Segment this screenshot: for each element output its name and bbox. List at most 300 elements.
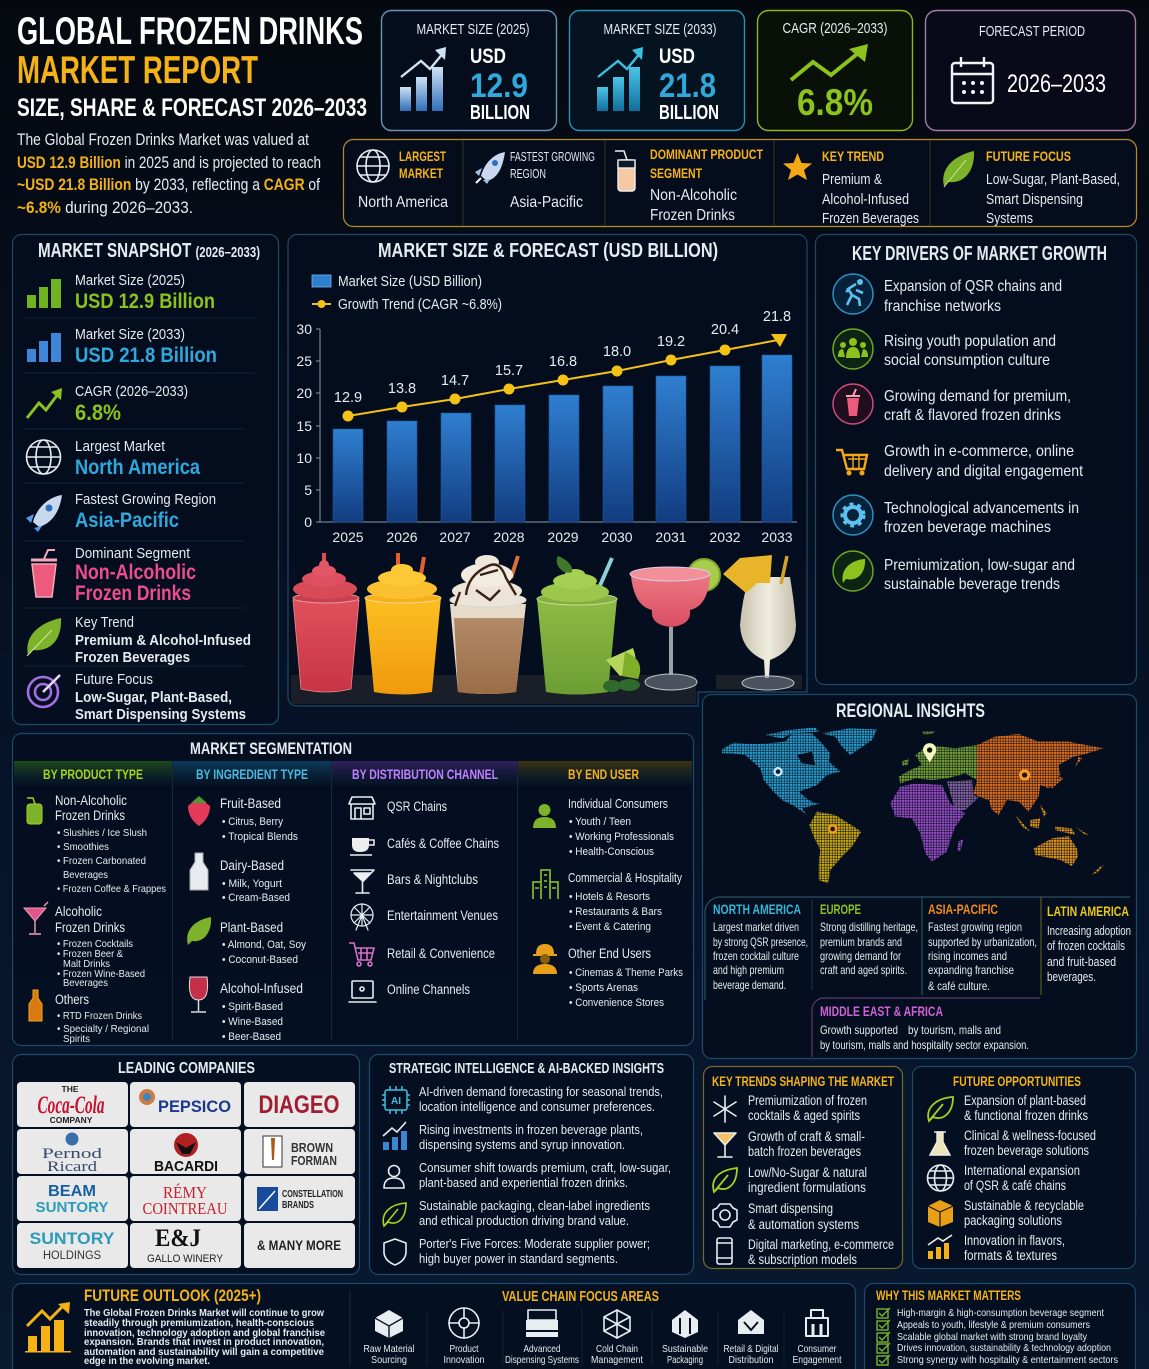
value chain: sustainable packaging: Sustainable (662, 1343, 708, 1355)
trend: smart dispensing (713, 1201, 859, 1232)
trend: craft: Growth of craft & small- (748, 1129, 865, 1144)
region: north america: NORTH AMERICA (713, 901, 801, 917)
logo: diageo: DIAGEO (258, 1091, 340, 1119)
logo: beam suntory: SUNTORY (36, 1199, 109, 1216)
row: market size 2033: Market Size (2033) (75, 326, 185, 343)
icon: globe (357, 150, 389, 182)
row: future focus: Smart Dispensing Systems (75, 706, 246, 723)
column: product type: • Smoothies (57, 841, 109, 853)
KPI card: market size 2033: MARKET SIZE (2033) (604, 21, 716, 38)
row: market size 2025: USD 12.9 Billion (75, 290, 215, 313)
KPI card: market size 2025 (382, 10, 556, 130)
driver: premium drinks: Growing demand for premium, (884, 388, 1071, 405)
column: distribution channel: Bars & Nightclubs (387, 872, 478, 887)
value chain: cold chain (591, 1310, 643, 1366)
trend: premiumization: cocktails & aged spirits (748, 1108, 860, 1123)
column: ingredient type: • Coconut-Based (222, 954, 298, 966)
checklist: Scalable global market with strong brand loyalty (897, 1331, 1088, 1343)
KPI card: forecast period: 2026–2033 (1007, 70, 1106, 98)
map pins (773, 743, 1030, 834)
KPI card: market size 2025: MARKET SIZE (2025) (416, 21, 530, 38)
column: ingredient type: Dairy-Based (220, 858, 284, 873)
value chain: product innovation (444, 1308, 485, 1366)
column: end user: • Convenience Stores (569, 997, 664, 1009)
row: key trend: Frozen Beverages (75, 649, 190, 666)
panel: leading companies: LEADING COMPANIES (118, 1060, 255, 1077)
outlook text: edge in the evolving market. (84, 1355, 210, 1367)
trend: premiumization: Premiumization of frozen (748, 1093, 867, 1108)
driver: premiumization: sustainable beverage trends (884, 576, 1060, 593)
logo: remy cointreau: COINTREAU (142, 1199, 228, 1218)
column: ingredient type: • Milk, Yogurt (222, 878, 282, 890)
insight: AI forecasting: location intelligence and consumer preferences. (419, 1099, 655, 1114)
item: key trend: Frozen Beverages (822, 210, 919, 227)
value chain: raw material: Sourcing (371, 1354, 407, 1366)
icon: star (783, 153, 812, 180)
logo: remy cointreau: RÉMY (163, 1183, 207, 1202)
opportunity: international: of QSR & café chains (964, 1178, 1066, 1193)
bar chart: 20 (296, 385, 312, 401)
value chain: cold chain: Management (591, 1354, 643, 1366)
region: asia-pacific: & café culture. (928, 979, 990, 993)
trend line (334, 309, 791, 422)
opportunity: clinical: frozen beverage solutions (964, 1143, 1089, 1158)
row: dominant segment: Dominant Segment (75, 545, 191, 562)
region: asia-pacific: ASIA-PACIFIC (928, 901, 998, 917)
region: middle east and africa: Growth supported (820, 1023, 898, 1037)
column: ingredient type: • Citrus, Berry (222, 816, 283, 828)
row: CAGR: 6.8% (75, 400, 121, 425)
panel: why this market matters: WHY THIS MARKET MATTERS (876, 1288, 1021, 1303)
region: latin america: of frozen cocktails (1047, 939, 1125, 953)
title block: GLOBAL FROZEN DRINKS (17, 10, 363, 53)
region: north america: and high premium (713, 963, 784, 977)
region: middle east and africa: MIDDLE EAST & AFRICA (820, 1003, 943, 1019)
row: dominant segment: Frozen Drinks (75, 582, 191, 605)
checklist: Appeals to youth, lifestyle & premium consumers (897, 1319, 1090, 1331)
bar chart: 2031 (655, 529, 687, 545)
icon: outlook chart (25, 1302, 71, 1352)
column: product type: Others (55, 992, 89, 1007)
panel: strategic intelligence (370, 1054, 694, 1274)
column: ingredient type: • Almond, Oat, Soy (222, 939, 306, 951)
column: product type: • Specialty / Regional (57, 1023, 149, 1035)
trend: craft (714, 1129, 865, 1159)
chart legend: Market Size (USD Billion) (338, 274, 482, 290)
drink: matcha smoothie (537, 556, 617, 694)
logo: coca-cola: Coca-Cola (38, 1092, 104, 1119)
trend: craft: batch frozen beverages (748, 1144, 861, 1159)
panel: key drivers (816, 234, 1136, 684)
insight: consumer shift (384, 1160, 671, 1190)
panel: market size and forecast (288, 234, 807, 706)
insight: sustainable packaging: Sustainable packaging, clean-label ingredients (419, 1198, 650, 1213)
trend: low sugar: ingredient formulations (748, 1180, 866, 1195)
trend: digital marketing (717, 1237, 894, 1267)
column: ingredient type: • Tropical Blends (222, 831, 298, 843)
insight: consumer shift: Consumer shift towards premium, craft, low-sugar, (419, 1160, 671, 1175)
column: end user: Other End Users (568, 946, 651, 961)
column: product type: • RTD Frozen Drinks (57, 1010, 142, 1022)
driver: premiumization (833, 551, 1075, 593)
checklist: High-margin & high-consumption beverage segment (897, 1307, 1104, 1319)
column: distribution channel: Online Channels (387, 982, 470, 997)
row: future focus (28, 671, 246, 723)
item: key trend: Premium & (822, 171, 882, 188)
driver: youth population: social consumption culture (884, 352, 1050, 369)
KPI card: market size 2025: BILLION (470, 102, 530, 124)
item: key trend: KEY TREND (822, 148, 884, 164)
opportunity: plant-based: & functional frozen drinks (964, 1108, 1088, 1123)
region: north america: by strong QSR presence, (713, 935, 808, 949)
column: product type: Beverages (63, 977, 108, 989)
region: north america: Largest market driven (713, 920, 799, 934)
checklist (877, 1307, 1118, 1366)
bar chart: 0 (304, 514, 312, 530)
driver: premium drinks: craft & flavored frozen drinks (884, 407, 1061, 424)
driver: youth population: Rising youth population and (884, 333, 1056, 350)
opportunity: packaging (928, 1198, 1084, 1228)
region: middle east and africa (812, 998, 1040, 1057)
insight: five forces: high buyer power in standard segments. (419, 1251, 618, 1266)
column: product type: • Frozen Beer & (57, 948, 123, 960)
region: north america: beverage demand. (713, 978, 786, 992)
checklist: Strong synergy with hospitality & entertainment sectors (897, 1354, 1118, 1366)
bar chart: 2028 (493, 529, 525, 545)
value chain: raw material (364, 1310, 414, 1366)
item: future focus (943, 148, 1120, 227)
driver: e-commerce (836, 443, 1083, 480)
panel: regional insights (702, 694, 1136, 1058)
column: product type: Frozen Drinks (55, 920, 125, 935)
title block: SIZE, SHARE & FORECAST 2026–2033 (17, 94, 367, 122)
column: distribution channel: QSR Chains (387, 799, 447, 814)
logo: suntory holdings (30, 1229, 115, 1262)
logo: gallo: E&J (155, 1225, 201, 1252)
insight: investments (383, 1122, 643, 1152)
item: dominant product segment: Non-Alcoholic (650, 187, 737, 204)
bar chart: 2027 (439, 529, 471, 545)
icon: ferris wheel (351, 904, 373, 930)
intro paragraph (17, 130, 321, 217)
value chain: consumer engagement (792, 1310, 842, 1366)
driver: premium drinks (833, 384, 1071, 424)
world map (722, 727, 1104, 883)
row: dominant segment (31, 545, 196, 605)
panel: future outlook and value chain (12, 1284, 856, 1369)
panel: future outlook and value chain: VALUE CHAIN FOCUS AREAS (502, 1289, 659, 1305)
outlook text (84, 1307, 325, 1367)
opportunity: innovation: formats & textures (964, 1248, 1057, 1263)
opportunity: packaging: packaging solutions (964, 1213, 1062, 1228)
region: asia-pacific: expanding franchise (928, 963, 1014, 977)
trend: smart dispensing: Smart dispensing (748, 1201, 833, 1216)
title block (17, 10, 367, 122)
column: product type: • Frozen Coffee & Frappes (57, 883, 166, 895)
bar chart: 2029 (547, 529, 579, 545)
region: north america: frozen cocktail culture (713, 949, 799, 963)
insight: five forces: Porter's Five Forces: Moderate supplier power; (419, 1236, 650, 1251)
insight: AI forecasting (382, 1084, 663, 1114)
item: largest market: North America (358, 194, 448, 211)
column: end user: • Youth / Teen (569, 816, 631, 828)
icon: calendar (952, 57, 993, 103)
item: fastest growing region (475, 149, 595, 211)
trend line: 19.2 (657, 334, 685, 350)
row: market size 2033 (27, 326, 217, 367)
logo: pernod ricard (42, 1132, 103, 1175)
drinks photo (291, 553, 802, 704)
item: dominant product segment: DOMINANT PRODUCT (650, 146, 763, 162)
column: end user: • Restaurants & Bars (569, 906, 662, 918)
row: key trend (27, 614, 251, 666)
column: distribution channel: Retail & Convenience (387, 946, 495, 961)
logo: pernod ricard: Ricard (47, 1159, 98, 1175)
value chain: product innovation: Innovation (444, 1354, 485, 1366)
trend: low sugar: Low/No-Sugar & natural (748, 1165, 867, 1180)
KPI card: forecast period (926, 10, 1136, 130)
logo: pepsico (139, 1089, 231, 1116)
icon: milk bottle (190, 853, 208, 890)
item: largest market: MARKET (399, 165, 443, 181)
KPI card: CAGR (758, 10, 912, 130)
logo: brown forman (263, 1136, 337, 1168)
column: ingredient type: Alcohol-Infused (220, 981, 303, 996)
icon: orange bottle (29, 990, 42, 1021)
column: product type: • Frozen Wine-Based (57, 968, 145, 980)
checklist: Drives innovation, sustainability & technology adoption (897, 1342, 1111, 1354)
driver: QSR chains: franchise networks (884, 298, 1001, 315)
item: dominant product segment: SEGMENT (650, 165, 702, 181)
row: market size 2033: USD 21.8 Billion (75, 344, 217, 367)
column: distribution channel: Entertainment Venues (387, 908, 498, 923)
value chain: consumer engagement: Engagement (792, 1354, 842, 1366)
opportunity: clinical: Clinical & wellness-focused (964, 1128, 1096, 1143)
trend line: 14.7 (441, 373, 469, 389)
value chain: retail distribution: Retail & Digital (724, 1343, 778, 1355)
column: product type: Beverages (63, 869, 108, 881)
opportunity: international (928, 1163, 1080, 1193)
icon: green trend arrow (791, 44, 868, 80)
panel: market segmentation (12, 734, 694, 1046)
opportunity: packaging: Sustainable & recyclable (964, 1198, 1084, 1213)
logo: constellation brands: BRANDS (282, 1200, 314, 1211)
driver: QSR chains (833, 274, 1062, 315)
drink: mango slush (365, 553, 441, 694)
panel: future opportunities: FUTURE OPPORTUNITIES (953, 1074, 1081, 1089)
column: end user: • Event & Catering (569, 921, 651, 933)
bar chart: 2033 (761, 529, 793, 545)
bar chart (296, 321, 797, 545)
outlook text: The Global Frozen Drinks Market will continue to grow (84, 1307, 325, 1319)
insight: investments: Rising investments in frozen beverage plants, (419, 1122, 643, 1137)
insight: consumer shift: plant-based and experiential frozen drinks. (419, 1175, 628, 1190)
region: asia-pacific: rising incomes and (928, 949, 1007, 963)
icon: shopping cart (349, 943, 374, 966)
value chain: consumer engagement: Consumer (798, 1343, 837, 1355)
trend: premiumization (714, 1093, 867, 1123)
item: key trend (783, 148, 919, 227)
row: largest market: North America (75, 456, 200, 479)
bar chart: 2026 (386, 529, 418, 545)
value chain: sustainable packaging (662, 1310, 708, 1366)
trend line: 15.7 (495, 363, 523, 379)
title block: MARKET REPORT (17, 49, 258, 92)
item: dominant product segment: Frozen Drinks (650, 207, 735, 224)
column: distribution channel (349, 797, 499, 1002)
icon: leaf (943, 151, 974, 187)
driver: QSR chains: Expansion of QSR chains and (884, 278, 1062, 295)
value chain: dispensing (505, 1310, 579, 1366)
KPI card: forecast period: FORECAST PERIOD (979, 23, 1085, 40)
opportunity: clinical (930, 1128, 1096, 1158)
icon: pink martini (24, 902, 48, 934)
panel: market snapshot: MARKET SNAPSHOT (2026–2033) (38, 240, 260, 262)
opportunity: innovation: Innovation in flavors, (964, 1233, 1065, 1248)
panel: strategic intelligence: STRATEGIC INTELLIGENCE & AI-BACKED INSIGHTS (389, 1061, 664, 1077)
logo: remy cointreau (142, 1183, 228, 1218)
region: latin america (1047, 903, 1131, 984)
panel: key trends (704, 1066, 902, 1268)
column: product type: • Frozen Cocktails (57, 938, 133, 950)
insight: sustainable packaging (383, 1198, 650, 1228)
icon: drink cup (615, 151, 635, 191)
row: CAGR (27, 383, 188, 425)
region: europe: EUROPE (820, 901, 861, 917)
logo: bacardi (154, 1133, 218, 1175)
icon: strawberry (188, 796, 210, 826)
logo: gallo (147, 1225, 224, 1265)
drink: chocolate frappe (450, 555, 526, 694)
bar chart: 2025 (332, 529, 364, 545)
KPI card: market size 2033: BILLION (659, 102, 719, 124)
panel: future outlook and value chain: FUTURE OUTLOOK (2025+) (84, 1286, 261, 1305)
value chain: retail distribution (724, 1310, 778, 1366)
panel: leading companies (12, 1054, 360, 1274)
column: end user: Commercial & Hospitality (568, 870, 682, 885)
trend: digital marketing: Digital marketing, e-commerce (748, 1237, 894, 1252)
icon: laptop (349, 981, 376, 1002)
opportunity: plant-based: Expansion of plant-based (964, 1093, 1086, 1108)
column: product type: Alcoholic (55, 904, 102, 919)
row: key trend: Premium & Alcohol-Infused (75, 632, 251, 649)
region: europe: growing demand for (820, 949, 901, 963)
column: product type: • Slushies / Ice Slush (57, 827, 147, 839)
icon: worker (533, 944, 557, 974)
row: dominant segment: Non-Alcoholic (75, 561, 196, 584)
outlook text: steadily through premiumization, health-conscious (84, 1317, 314, 1329)
item: dominant product segment (615, 146, 763, 224)
icon: wine glass (189, 977, 208, 1012)
column: end user: • Health-Conscious (569, 846, 654, 858)
logo: beam suntory (36, 1183, 109, 1216)
panel: future opportunities (912, 1066, 1136, 1268)
opportunity: innovation (928, 1233, 1065, 1263)
bar chart: 5 (304, 482, 312, 498)
column headers: BY END USER (568, 767, 639, 782)
KPI card: market size 2025: USD (470, 45, 506, 68)
intro paragraph: USD 12.9 Billion in 2025 and is projected to reach (17, 153, 321, 172)
region: north america (713, 901, 808, 992)
column: ingredient type (187, 796, 306, 1043)
column: ingredient type: • Spirit-Based (222, 1001, 283, 1013)
region: asia-pacific (928, 901, 1037, 993)
outlook text: innovation, technology adoption and global franchise (84, 1327, 325, 1339)
column: product type: Non-Alcoholic (55, 793, 127, 808)
icon: cocktail glass (351, 870, 374, 893)
column: ingredient type: • Beer-Based (222, 1031, 281, 1043)
column: ingredient type: • Cream-Based (222, 892, 290, 904)
row: fastest growing region: Asia-Pacific (75, 509, 179, 532)
column: end user: • Hotels & Resorts (569, 891, 650, 903)
panel: key trends: KEY TRENDS SHAPING THE MARKET (712, 1074, 895, 1089)
column: ingredient type: Plant-Based (220, 920, 283, 935)
icon: storefront (349, 797, 375, 819)
item: future focus: Systems (986, 210, 1033, 227)
item: fastest growing region: FASTEST GROWING (510, 149, 595, 164)
icon: building (533, 870, 558, 899)
panel: regional insights: REGIONAL INSIGHTS (836, 701, 985, 722)
trend line: 13.8 (388, 381, 416, 397)
row: fastest growing region: Fastest Growing Region (75, 491, 216, 508)
KPI card: market size 2033: 21.8 (659, 67, 716, 105)
item: largest market (357, 148, 448, 211)
region: europe: craft and aged spirits. (820, 963, 907, 977)
logo: coca-cola: COMPANY (50, 1115, 93, 1125)
trend: smart dispensing: & automation systems (748, 1217, 859, 1232)
KPI card: market size 2033 (570, 10, 744, 130)
logo: pepsico: PEPSICO (158, 1097, 231, 1116)
row: fastest growing region (26, 491, 216, 532)
trend line: 20.4 (711, 322, 739, 338)
garnish: lime and mint (603, 648, 640, 692)
value chain: raw material: Raw Material (364, 1343, 414, 1355)
trend: low sugar (713, 1165, 867, 1195)
bar chart: 15 (296, 418, 312, 434)
driver: e-commerce: delivery and digital engagement (884, 463, 1083, 480)
logo: pernod ricard: Pernod (42, 1146, 103, 1162)
column: product type: Spirits (63, 1033, 90, 1045)
driver: e-commerce: Growth in e-commerce, online (884, 443, 1074, 460)
logo: brown forman: FORMAN (291, 1153, 337, 1168)
column: ingredient type: • Wine-Based (222, 1016, 283, 1028)
column: product type: • Frozen Carbonated (57, 855, 146, 867)
column: end user: Individual Consumers (568, 796, 668, 811)
column: product type: Frozen Drinks (55, 808, 125, 823)
driver: technology (833, 495, 1079, 536)
column headers: BY DISTRIBUTION CHANNEL (352, 767, 498, 782)
icon: leaf (187, 917, 211, 945)
item: largest market: LARGEST (399, 148, 446, 164)
column: product type: Malt Drinks (63, 958, 110, 970)
info band (344, 140, 1136, 227)
intro paragraph: ~USD 21.8 Billion by 2033, reflecting a CAGR of (17, 175, 320, 194)
opportunity: international: International expansion (964, 1163, 1080, 1178)
panel: market segmentation: MARKET SEGMENTATION (190, 739, 352, 758)
tile: many more: & MANY MORE (257, 1238, 341, 1253)
region: europe: premium brands and (820, 935, 902, 949)
row: key trend: Key Trend (75, 614, 134, 631)
region: middle east and africa: by tourism, malls and (908, 1023, 1001, 1037)
icon: rocket (475, 152, 505, 184)
column: distribution channel: Cafés & Coffee Chains (387, 836, 499, 851)
column: ingredient type: Fruit-Based (220, 796, 281, 811)
trend: digital marketing: & subscription models (748, 1252, 857, 1267)
KPI card: CAGR: 6.8% (797, 82, 873, 123)
drink: pina colada (723, 555, 796, 690)
row: future focus: Future Focus (75, 671, 153, 688)
region: asia-pacific: Fastest growing region (928, 920, 1022, 934)
